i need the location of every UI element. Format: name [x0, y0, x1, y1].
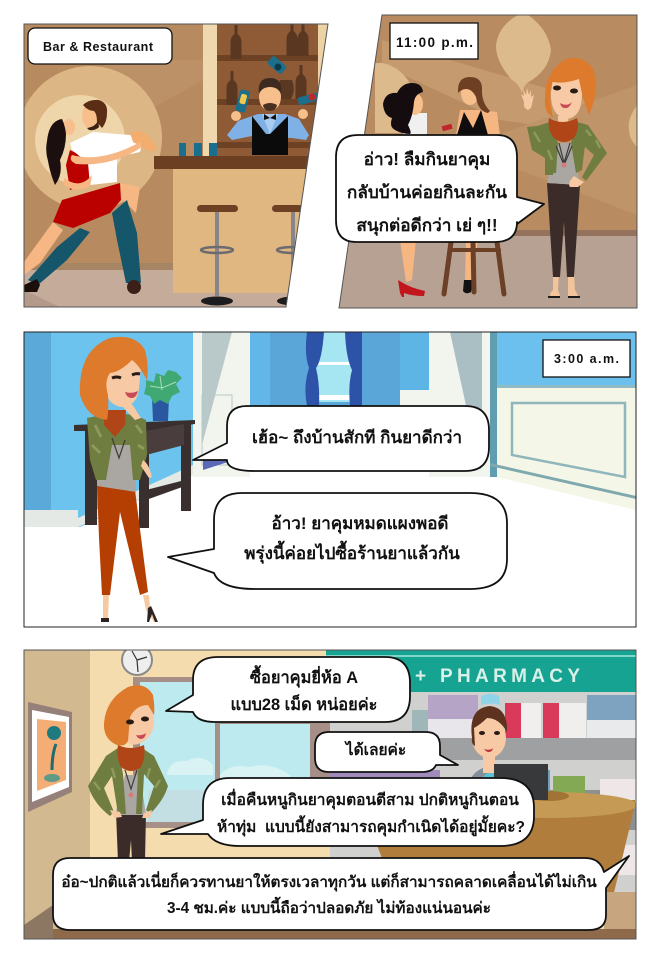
label: 11:00 p.m. — [390, 23, 478, 59]
speech bubble: ask for brand A — [166, 657, 410, 722]
label: Bar & Restaurant: Bar & Restaurant — [43, 40, 154, 54]
left door — [193, 332, 250, 477]
woman at pharmacy — [88, 685, 168, 862]
speech bubble: home at last: เฮ้อ~ ถึงบ้านสักที กินยาดีกว่า — [252, 427, 462, 447]
side table and plant — [74, 370, 195, 528]
speech bubble: pharmacist reply — [315, 732, 458, 772]
label: Bar & Restaurant — [28, 28, 172, 64]
speech bubble: out of pills: อ้าว! ยาคุมหมดแผงพอดี — [272, 513, 448, 534]
speech bubble: home at last — [193, 406, 489, 471]
label: 3:00 a.m.: 3:00 a.m. — [554, 352, 619, 366]
back shelves with bottles — [217, 22, 330, 157]
pharmacist — [471, 694, 507, 778]
speech bubble: out of pills — [168, 493, 507, 589]
speech bubble: question about late dose: เมื่อคืนหนูกินยาคุมตอนตีสาม ปกติหนูกินตอน — [221, 788, 519, 811]
stool — [444, 242, 504, 294]
shop sign: + PHARMACY — [415, 666, 580, 687]
bartender — [227, 55, 319, 155]
speech bubble: forgot pill — [336, 135, 544, 242]
panel: pharmacy — [24, 645, 637, 939]
label: 11:00 p.m.: 11:00 p.m. — [396, 35, 473, 50]
framed picture — [28, 702, 72, 812]
speech bubble: pharmacist advice: 3-4 ชม.ค่ะ แบบนี้ถือว่าปลอดภัย ไม่ท้องแน่นอนค่ะ — [167, 896, 491, 917]
pharmacy shelves — [330, 692, 636, 902]
counter — [154, 156, 324, 293]
friend with brown hair — [442, 77, 500, 293]
speech bubble: forgot pill: สนุกต่อดีกว่า เย่ ๆ!! — [356, 215, 498, 236]
wall lamps — [375, 15, 637, 147]
friend with black hair — [383, 83, 427, 297]
speech bubble: out of pills: พรุ่งนี้ค่อยไปซื้อร้านยาแล้วกัน — [244, 540, 460, 564]
label: 3:00 a.m. — [543, 340, 630, 377]
panel: 11 p.m. friends — [336, 15, 637, 308]
speech bubble: pharmacist advice: อ๋อ~ปกติแล้วเนี่ยก็ควรทานยาให้ตรงเวลาทุกวัน แต่ก็สามารถคลาดเคลื่อนได้ไม่เกิน — [61, 870, 597, 892]
reception counter — [378, 791, 636, 892]
bar stools — [197, 205, 301, 306]
back wall and window — [250, 332, 429, 406]
speech bubble: forgot pill: อ่าว! ลืมกินยาคุม — [364, 149, 490, 170]
panel: bar and restaurant — [18, 22, 330, 307]
speech bubble: forgot pill: กลับบ้านค่อยกินละกัน — [347, 182, 507, 202]
woman thinking — [80, 337, 158, 622]
computer monitor — [494, 764, 548, 800]
speech bubble: question about late dose: ห้าทุ่ม แบบนี้ยังสามารถคุมกำเนิดได้อยู่มั้ยคะ? — [217, 815, 525, 838]
window — [133, 677, 333, 828]
dancing couple — [21, 100, 157, 294]
speech bubble: question about late dose — [161, 778, 534, 846]
panel: 3 a.m. at home — [24, 332, 636, 627]
juggled bottles — [235, 55, 319, 113]
shop sign — [326, 650, 636, 692]
speech bubble: ask for brand A: ซื้อยาคุมยี่ห้อ A — [250, 665, 358, 688]
main woman waving — [521, 58, 607, 298]
cups — [179, 143, 217, 156]
speech bubble: ask for brand A: แบบ28 เม็ด หน่อยค่ะ — [230, 693, 378, 714]
wall clock — [122, 645, 152, 675]
spotlight circles — [24, 66, 162, 204]
right door — [429, 332, 497, 477]
speech bubble: pharmacist reply: ได้เลยค่ะ — [344, 740, 406, 759]
floor — [24, 892, 636, 939]
right wall with panel — [490, 332, 636, 510]
speech bubble: pharmacist advice — [53, 856, 629, 930]
